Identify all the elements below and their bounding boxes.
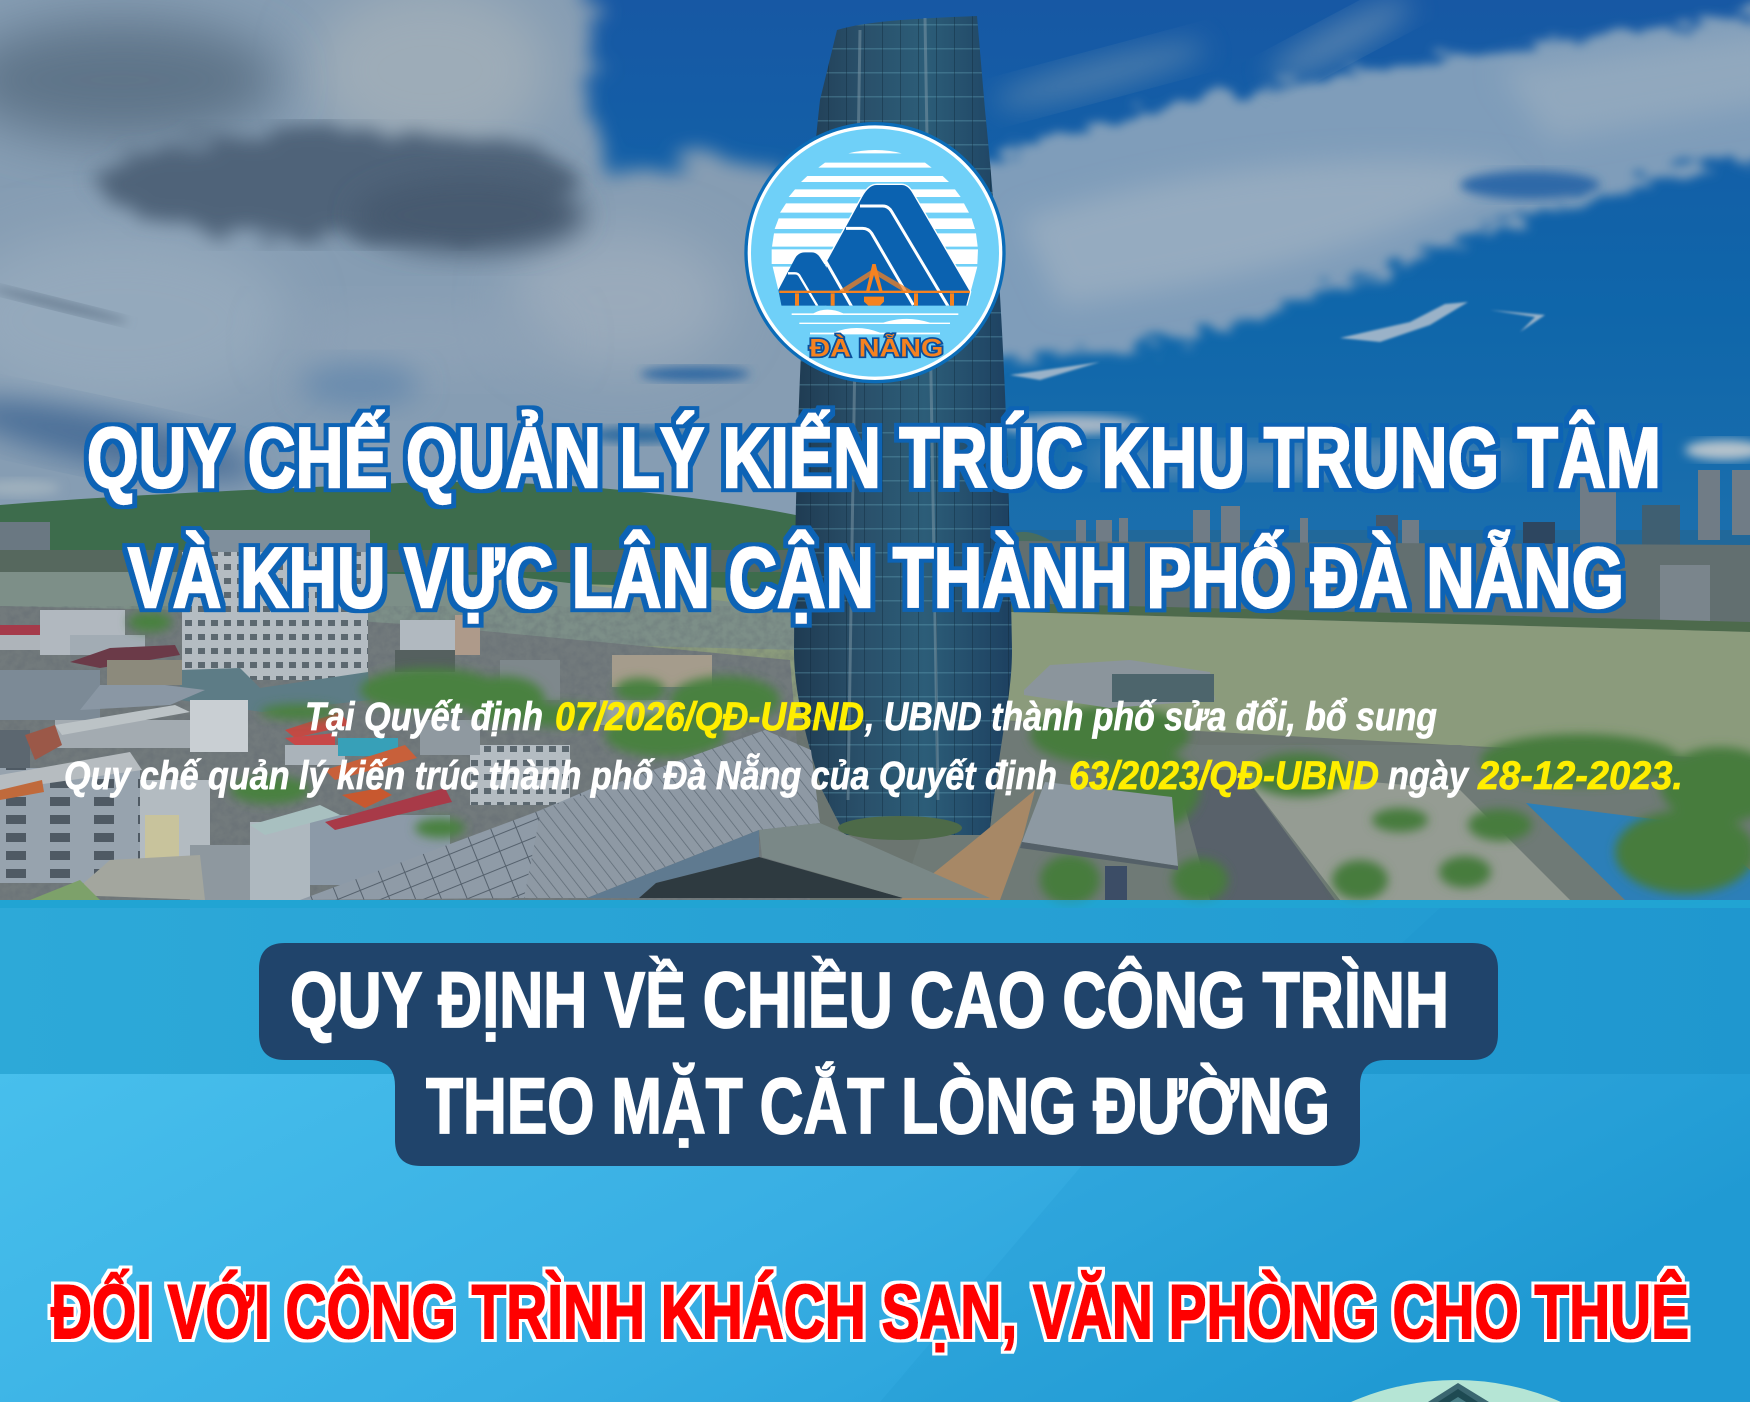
riverside trees [1030,705,1750,905]
panel: lower blue section [0,900,1750,1402]
riverside building [1024,660,1215,708]
title [87,410,1661,626]
left hills [0,482,820,590]
sky [0,0,1750,620]
far bank right [820,540,1750,630]
far city right skyline [1000,470,1750,560]
tower [794,16,1012,835]
subtitle text: 28-12-2023. [1477,754,1683,798]
subtitle text [64,695,1683,798]
section heading banner: THEO MẶT CẮT LÒNG ĐƯỜNG [426,1061,1330,1150]
bridge [779,264,970,306]
city buildings [0,552,712,900]
background photo: Da Nang city with administration tower [0,0,1750,905]
convention roof right [1022,782,1178,866]
photo ground base [0,540,1750,900]
subtitle text: 07/2026/QĐ-UBND [555,695,864,739]
wisps lower right [1010,302,1545,380]
left skyline [0,522,820,572]
city texture [0,606,810,900]
river [0,570,1750,760]
section heading banner: QUY ĐỊNH VỀ CHIỀU CAO CÔNG TRÌNH [290,955,1449,1044]
subtitle text: 63/2023/QĐ-UBND [1069,754,1379,798]
clouds left [0,0,830,560]
logo: Da Nang emblem [744,122,1006,383]
subtitle text: Quy chế quản lý kiến trúc thành phố Đà Nẵng của Quyết định [64,752,1057,798]
plaza and base [838,790,1035,900]
trees in the city [128,612,780,838]
logo wordmark: ĐÀ NẴNG [809,334,943,363]
right riverside [900,720,1750,900]
convention roof left [300,730,990,900]
icon: house roof in mint circle [1351,1380,1561,1402]
section heading banner [259,943,1498,1166]
subtitle text: ngày [1388,754,1470,798]
left city base [0,606,810,900]
subtitle text: , UBND thành phố sửa đổi, bổ sung [864,695,1437,739]
clouds right [960,0,1750,360]
subtitle text: Tại Quyết định [305,695,543,739]
